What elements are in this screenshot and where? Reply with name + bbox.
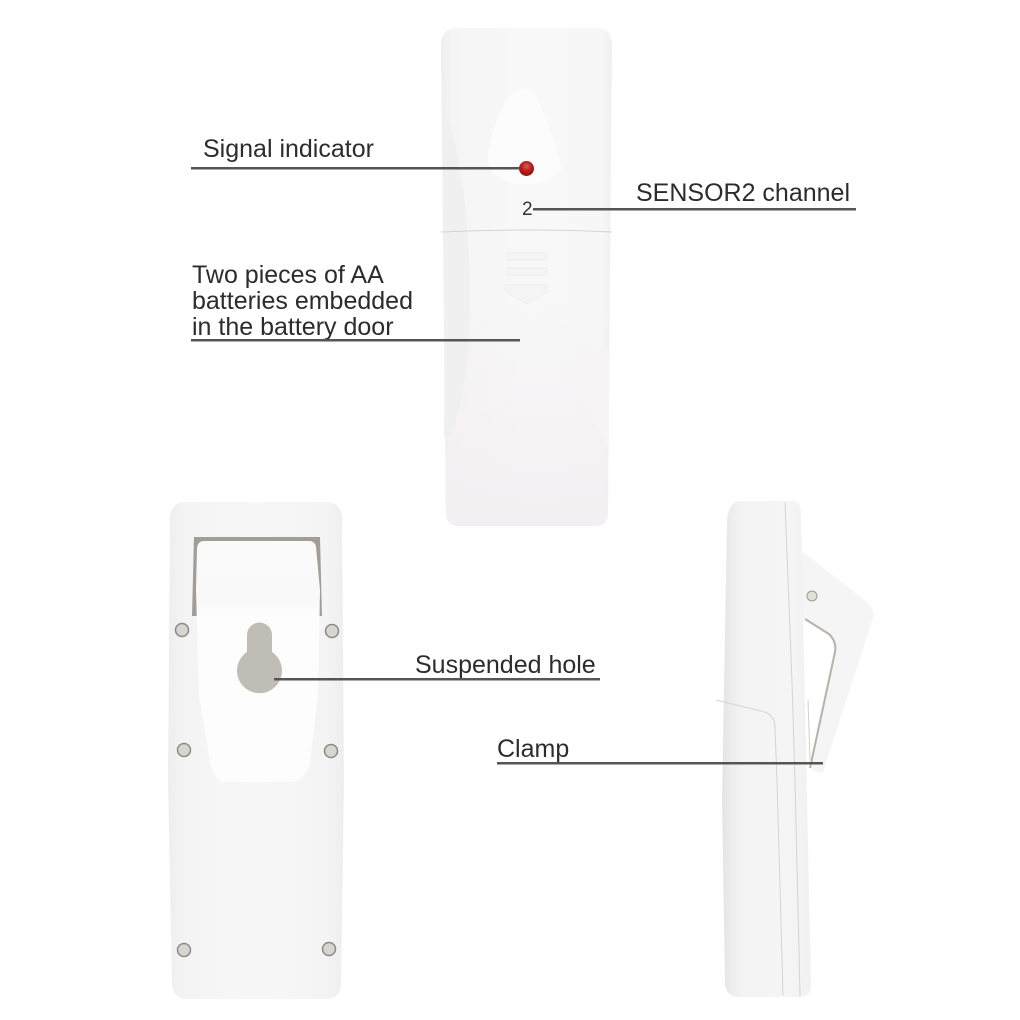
callout: battery door: batteries embedded — [192, 287, 413, 315]
side body — [722, 501, 811, 997]
body contour left — [444, 115, 470, 437]
suspended keyhole — [237, 622, 282, 693]
callout: battery door: Two pieces of AA — [192, 261, 384, 289]
side view of sensor — [716, 501, 873, 997]
body contour right — [575, 350, 610, 450]
screws — [176, 624, 338, 956]
callout: SENSOR2 channel: SENSOR2 channel — [636, 179, 850, 207]
side clip — [800, 550, 873, 773]
battery door seam — [441, 230, 612, 232]
front view of sensor — [441, 28, 612, 526]
signal LED — [519, 161, 534, 176]
callout: clamp: Clamp — [497, 735, 569, 763]
indicator recess — [488, 88, 562, 184]
callout: battery door — [191, 261, 520, 342]
small clip edge — [808, 700, 810, 760]
side seam — [785, 502, 800, 996]
channel number: 2 — [522, 199, 533, 220]
clip screw — [807, 591, 817, 601]
clip recess — [192, 537, 322, 616]
callout: battery door: in the battery door — [192, 313, 394, 341]
belt clip — [196, 541, 320, 782]
clip spring wire — [805, 619, 835, 768]
battery door arrow marks — [506, 253, 547, 304]
battery door seam — [716, 700, 783, 995]
back view of sensor — [168, 502, 344, 999]
callout: signal indicator: Signal indicator — [203, 135, 374, 163]
callout: suspended hole: Suspended hole — [415, 651, 596, 679]
